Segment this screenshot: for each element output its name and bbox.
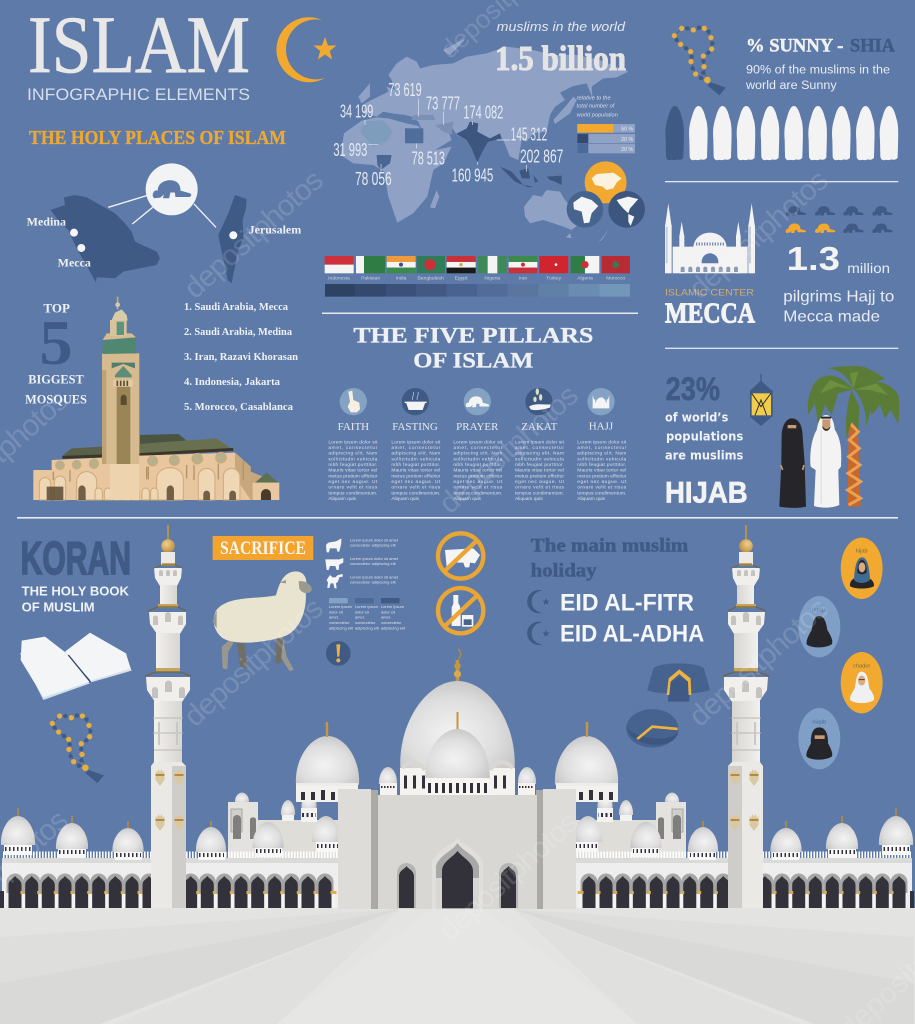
number: 5: 5 (39, 308, 73, 378)
icon: hijab (841, 538, 883, 599)
text: fasting description: Mauris vitae tortor vel (391, 468, 440, 474)
label: Mecca: MECCA (665, 299, 755, 330)
illustration: sheep (213, 571, 312, 671)
dome: small right (518, 767, 536, 795)
facade (378, 795, 537, 909)
numbers: muslim population: 78 056 (355, 168, 392, 189)
note: relative to population: total number of (577, 104, 616, 110)
icon: faith (340, 388, 367, 415)
icon: open book (20, 633, 132, 700)
arcade: main dome (400, 762, 515, 795)
illustration: mosque left half (0, 525, 400, 1024)
labels: countries: Morocco (606, 275, 625, 281)
map: highlighted countries (360, 115, 562, 187)
icon: small camel (327, 574, 343, 588)
illustration: man in white (810, 415, 841, 508)
numbers: muslim population: 160 945 (452, 165, 493, 186)
labels: countries: Pakistan (361, 275, 380, 281)
text: fasting description: metus pretium efficitur (391, 473, 441, 479)
labels: countries: Indonesia (328, 275, 350, 281)
legend: three column notes: dolor sit (355, 609, 370, 614)
text: hajj description: adipiscing elit. Nam (577, 451, 626, 457)
dome: small left (379, 767, 397, 795)
text: prayer description: adipiscing elit. Nam (453, 451, 502, 457)
text: hajj description: tempus condimentum. (577, 490, 626, 496)
list: five biggest mosques: 1. Saudi Arabia, Mecca (184, 301, 288, 313)
icon: white mosque (665, 203, 755, 273)
text: hajj description: sollicitudin vehicula (577, 456, 627, 462)
text: fasting description: ornare velit et risus (391, 485, 441, 491)
label: Islamic center: ISLAMIC CENTER (665, 287, 755, 297)
text: animal notes: Lorem ipsum dolor sit amet (350, 538, 399, 543)
chart: pilgrims icons (786, 206, 893, 233)
text: zakat description: nibh feugiat porttitor. (515, 462, 564, 468)
heading: holy places: THE HOLY PLACES OF ISLAM (29, 127, 286, 149)
map: islands (358, 38, 577, 208)
text: zakat description: metus pretium efficitur (515, 473, 564, 479)
side window right (499, 863, 518, 908)
label: Jerusalem: Jerusalem (249, 222, 301, 236)
note: relative to population: world population (577, 113, 618, 119)
text: zakat description (515, 439, 565, 502)
labels: countries: India (396, 275, 407, 281)
list: five biggest mosques (184, 301, 298, 413)
illustration: Hassan II mosque (33, 297, 279, 500)
dome: front finial (456, 712, 458, 729)
legend: three column notes: adipiscing elit (355, 625, 380, 630)
text: zakat description: adipiscing elit. Nam (515, 451, 564, 457)
label: Eid al-Adha: EID AL-ADHA (560, 621, 704, 648)
panel: world population and hijab (665, 366, 899, 510)
label: Eid al-Fitr: EID AL-FITR (560, 590, 694, 617)
icon: no alcohol (438, 588, 483, 633)
labels: pillars: HAJJ (589, 420, 614, 432)
illustration: mosque right half (514, 525, 914, 1024)
labels: countries: Bangladesh (417, 275, 444, 281)
main door (432, 838, 483, 909)
number: 1.3 million: 1.3 (787, 241, 840, 278)
text: fasting description: adipiscing elit. Nam (391, 451, 440, 457)
illustration: woman in black (779, 418, 806, 508)
text: prayer description: Lorem ipsum dolor sit (453, 439, 503, 445)
text: hajj description: ornare velit et risus (577, 485, 627, 491)
text: faith description: Lorem ipsum dolor sit (328, 439, 378, 445)
text: hajj description: metus pretium efficitur (577, 473, 627, 479)
panel: head coverings (798, 538, 883, 769)
text: hajj description: amet, consectetur (577, 445, 627, 451)
numbers: muslim population: 202 867 (520, 146, 563, 167)
map: Saudi Arabia (51, 195, 160, 283)
text: faith description: nibh feugiat porttitor. (328, 462, 377, 468)
text: depositphotos (178, 164, 330, 305)
map: Australia (524, 190, 610, 243)
text: of world's populations: are muslims (665, 448, 743, 462)
text: prayer description: nibh feugiat porttitor. (453, 462, 502, 468)
text: zakat description: Mauris vitae tortor vel (515, 468, 564, 474)
icon: chador: chador (853, 663, 870, 669)
heading: five pillars: THE FIVE PILLARS (353, 322, 593, 347)
illustration: ground (0, 908, 915, 1024)
flags row (325, 256, 630, 273)
panel: five pillars (328, 322, 627, 502)
text: hajj description: nibh feugiat porttitor. (577, 462, 626, 468)
legend: three column notes: dolor sit (381, 609, 396, 614)
numbers: muslim population: 31 993 (333, 139, 367, 160)
labels: pillars: FASTING (392, 421, 438, 433)
panel: sunny and shia (665, 25, 898, 349)
list: five biggest mosques: 4. Indonesia, Jakarta (184, 376, 280, 388)
legend: three column notes: Lorem ipsum (355, 604, 379, 609)
text: prayer description: metus pretium efficitur (453, 473, 503, 479)
icon: crescent and star (276, 17, 336, 82)
text: prayer description: amet, consectetur (453, 445, 503, 451)
panel: Koran (20, 532, 132, 700)
legend: three column notes: consectetur (329, 620, 350, 625)
labels: countries: Egypt (455, 275, 468, 281)
text: faith description: amet, consectetur (328, 445, 378, 451)
text: fasting description: tempus condimentum. (391, 490, 440, 496)
numbers: muslim population: 73 777 (426, 92, 460, 113)
text: zakat description: tempus condimentum. (515, 490, 564, 496)
heading: holiday line two: holiday (531, 561, 597, 582)
icon: zakat (525, 388, 553, 415)
text: zakat description: amet, consectetur (515, 445, 564, 451)
list: five biggest mosques: 5. Morocco, Casablanca (184, 401, 293, 413)
text: depositphotos (433, 806, 585, 947)
text: faith description: eget nec augue. Ut (328, 479, 378, 485)
text: of muslim: OF MUSLIM (22, 600, 95, 614)
text: faith description: tempus condimentum. (328, 490, 377, 496)
icon: fasting (402, 388, 429, 415)
swatches: country scale (325, 284, 630, 297)
panel: top five mosques (25, 297, 279, 500)
legend: three column notes: amet, (329, 615, 339, 620)
illustration: palm tree (808, 366, 899, 507)
text: prayer description: eget nec augue. Ut (453, 479, 503, 485)
icon: hajj (587, 388, 615, 415)
label: biggest mosques: MOSQUES (25, 393, 87, 407)
label: million: million (847, 260, 890, 276)
labels: countries: Algeria (577, 275, 593, 281)
text: fasting description: amet, consectetur (391, 445, 441, 451)
text: zakat description: Lorem ipsum dolor sit (515, 439, 565, 445)
text: fasting description: sollicitudin vehicula (391, 456, 441, 462)
text: zakat description: eget nec augue. Ut (515, 479, 565, 485)
icon: crescent two (527, 622, 550, 645)
labels: countries: Nigeria (484, 275, 500, 281)
text: hajj description: Mauris vitae tortor vel (577, 468, 626, 474)
legend: three column notes: consectetur (381, 620, 402, 625)
map: Eurasia (363, 47, 628, 163)
labels: pillars: PRAYER (456, 421, 499, 433)
icon: prayer circle (146, 163, 198, 215)
labels: countries: Turkey (546, 275, 562, 281)
text: fasting description: Aliquam quis (391, 496, 420, 502)
icon: hat (647, 663, 710, 702)
icon: round cap (626, 709, 679, 748)
text: animal notes: Lorem ipsum dolor sit amet (350, 574, 399, 579)
legend: three column notes: amet, (381, 615, 391, 620)
number: 23 percent: 23% (666, 370, 720, 407)
text: zakat description: sollicitudin vehicula (515, 456, 564, 462)
text: sunny share: 90% of the muslims in the (746, 63, 890, 77)
heading: Koran: KORAN (21, 532, 131, 584)
text: depositphotos (433, 379, 585, 520)
icon: crescent one (527, 590, 550, 613)
text: animal notes: consectetur adipiscing elit (350, 579, 396, 584)
legend: three column notes: adipiscing elit (329, 625, 354, 630)
text: animal notes (350, 538, 399, 584)
heading: sunny: % SUNNY - (746, 36, 843, 57)
text: hajj description (577, 439, 627, 502)
text: prayer description (453, 439, 503, 502)
text: zakat description: Aliquam quis (515, 496, 543, 502)
icon: prayer (464, 388, 491, 415)
text: sunny share line two: world are Sunny (745, 78, 837, 92)
list: five biggest mosques: 3. Iran, Razavi Khorasan (184, 351, 298, 363)
dome: main (400, 681, 515, 771)
icon: prayer beads (672, 25, 726, 95)
icon: chador (841, 652, 883, 713)
icon: niqab (798, 708, 840, 769)
number: 1.5 billion: 1.5 billion (495, 40, 626, 78)
legend: three column notes: Lorem ipsum (381, 604, 405, 609)
text: depositphotos (178, 592, 330, 733)
label: biggest mosques: BIGGEST (28, 373, 84, 387)
labels: countries (328, 275, 625, 281)
text: of world's populations: of world’s (665, 411, 728, 425)
icon: small cow (325, 558, 343, 570)
text: fasting description (391, 439, 441, 502)
legend: three column notes (329, 598, 406, 630)
icon: hijab: hijab (856, 549, 868, 555)
text: holy book: THE HOLY BOOK (22, 585, 130, 599)
legend: population shares: 60 % (621, 127, 634, 133)
dome: main finial (454, 649, 461, 681)
icon: exclamation (326, 641, 351, 666)
text: depositphotos (683, 592, 835, 733)
heading: main holiday: The main muslim (531, 536, 688, 557)
panel: forbidden and holidays (438, 533, 710, 748)
chart: ten figures, one shia (665, 106, 898, 160)
text: faith description: Aliquam quis (328, 496, 357, 502)
text: faith description: metus pretium efficitur (328, 473, 378, 479)
text: faith description: Mauris vitae tortor vel (328, 468, 377, 474)
text: prayer description: Mauris vitae tortor vel (453, 468, 502, 474)
text: faith description: sollicitudin vehicula (328, 456, 378, 462)
text: of world's populations (665, 411, 743, 462)
list: five biggest mosques: 2. Saudi Arabia, Medina (184, 326, 292, 338)
label: Medina: Medina (27, 215, 66, 229)
panel: sacrifice (213, 536, 406, 671)
text: hajj description: eget nec augue. Ut (577, 479, 627, 485)
title: ISLAM (28, 0, 250, 90)
labels: pillars: ZAKAT (521, 421, 558, 433)
numbers: muslim population: 145 312 (511, 124, 547, 145)
illustration: central mosque (378, 649, 537, 909)
text: faith description (328, 439, 378, 502)
text: hajj description: Aliquam quis (577, 496, 606, 502)
heading: of Islam: OF ISLAM (413, 347, 533, 372)
icon: globes (567, 161, 645, 228)
labels: countries: Iran (519, 275, 527, 281)
divider: centre (322, 312, 638, 314)
icon: no pork (438, 533, 483, 579)
legend: population shares (577, 124, 635, 153)
legend: three column notes: adipiscing elit (381, 625, 406, 630)
numbers: muslim population: 34 199 (340, 101, 373, 122)
subtitle: INFOGRAPHIC ELEMENTS (27, 85, 250, 104)
label: Mecca: Mecca (58, 256, 91, 270)
text: prayer description: tempus condimentum. (453, 490, 502, 496)
text: faith description: adipiscing elit. Nam (328, 451, 377, 457)
icon: burqa (798, 596, 840, 657)
icon: niqab: niqab (812, 719, 826, 725)
text: fasting description: nibh feugiat porttitor. (391, 462, 440, 468)
arcade: front dome (426, 778, 489, 795)
legend: three column notes: dolor sit (329, 609, 344, 614)
text: fasting description: eget nec augue. Ut (391, 479, 441, 485)
text: animal notes: consectetur adipiscing elit (350, 561, 396, 566)
icon: prayer beads (50, 713, 104, 783)
text: of world's populations: populations (666, 429, 743, 443)
heading: muslims in the world: muslims in the world (497, 19, 626, 34)
numbers: muslim population: 174 082 (463, 101, 503, 122)
text: depositphotos (683, 164, 835, 305)
legend: population shares: 20 % (621, 137, 634, 143)
divider: main section (17, 517, 898, 519)
text: pilgrims: pilgrims Hajj to (783, 289, 895, 306)
text: fasting description: Lorem ipsum dolor sit (391, 439, 441, 445)
text: zakat description: ornare velit et risus (515, 485, 565, 491)
map: Israel (218, 195, 247, 283)
legend: population shares: 20 % (621, 147, 634, 153)
text: prayer description: ornare velit et risus (453, 485, 503, 491)
legend: three column notes: amet, (355, 615, 365, 620)
icon: small sheep (326, 538, 341, 552)
text: faith description: ornare velit et risus (328, 485, 378, 491)
text: prayer description: sollicitudin vehicula (453, 456, 503, 462)
text: hajj description: Lorem ipsum dolor sit (577, 439, 627, 445)
icon: burqa: burqa (812, 608, 827, 614)
label: sacrifice: SACRIFICE (220, 538, 306, 559)
legend: three column notes: Lorem ipsum (329, 604, 353, 609)
labels: pillars: FAITH (338, 421, 369, 433)
note: relative to population: relative to the (577, 95, 611, 101)
icon: lantern (750, 374, 773, 426)
label: hijab: HIJAB (665, 477, 748, 510)
labels: pillars (338, 420, 614, 433)
panel: holy places map (27, 163, 301, 283)
side window left (397, 863, 416, 908)
text: animal notes: Lorem ipsum dolor sit amet (350, 556, 399, 561)
numbers: muslim population: 78 513 (412, 147, 445, 168)
label: top: TOP (43, 301, 70, 316)
numbers: muslim population: 73 619 (388, 79, 422, 100)
panel: world map (325, 19, 645, 297)
legend: three column notes: consectetur (355, 620, 376, 625)
numbers: muslim population (333, 79, 563, 189)
text: prayer description: Aliquam quis (453, 496, 482, 502)
dome: front (425, 729, 490, 779)
text: pilgrims line two: Mecca made (783, 309, 880, 326)
text: animal notes: consectetur adipiscing elit (350, 543, 396, 548)
heading: shia: SHIA (850, 36, 895, 57)
map: Africa (341, 117, 452, 223)
